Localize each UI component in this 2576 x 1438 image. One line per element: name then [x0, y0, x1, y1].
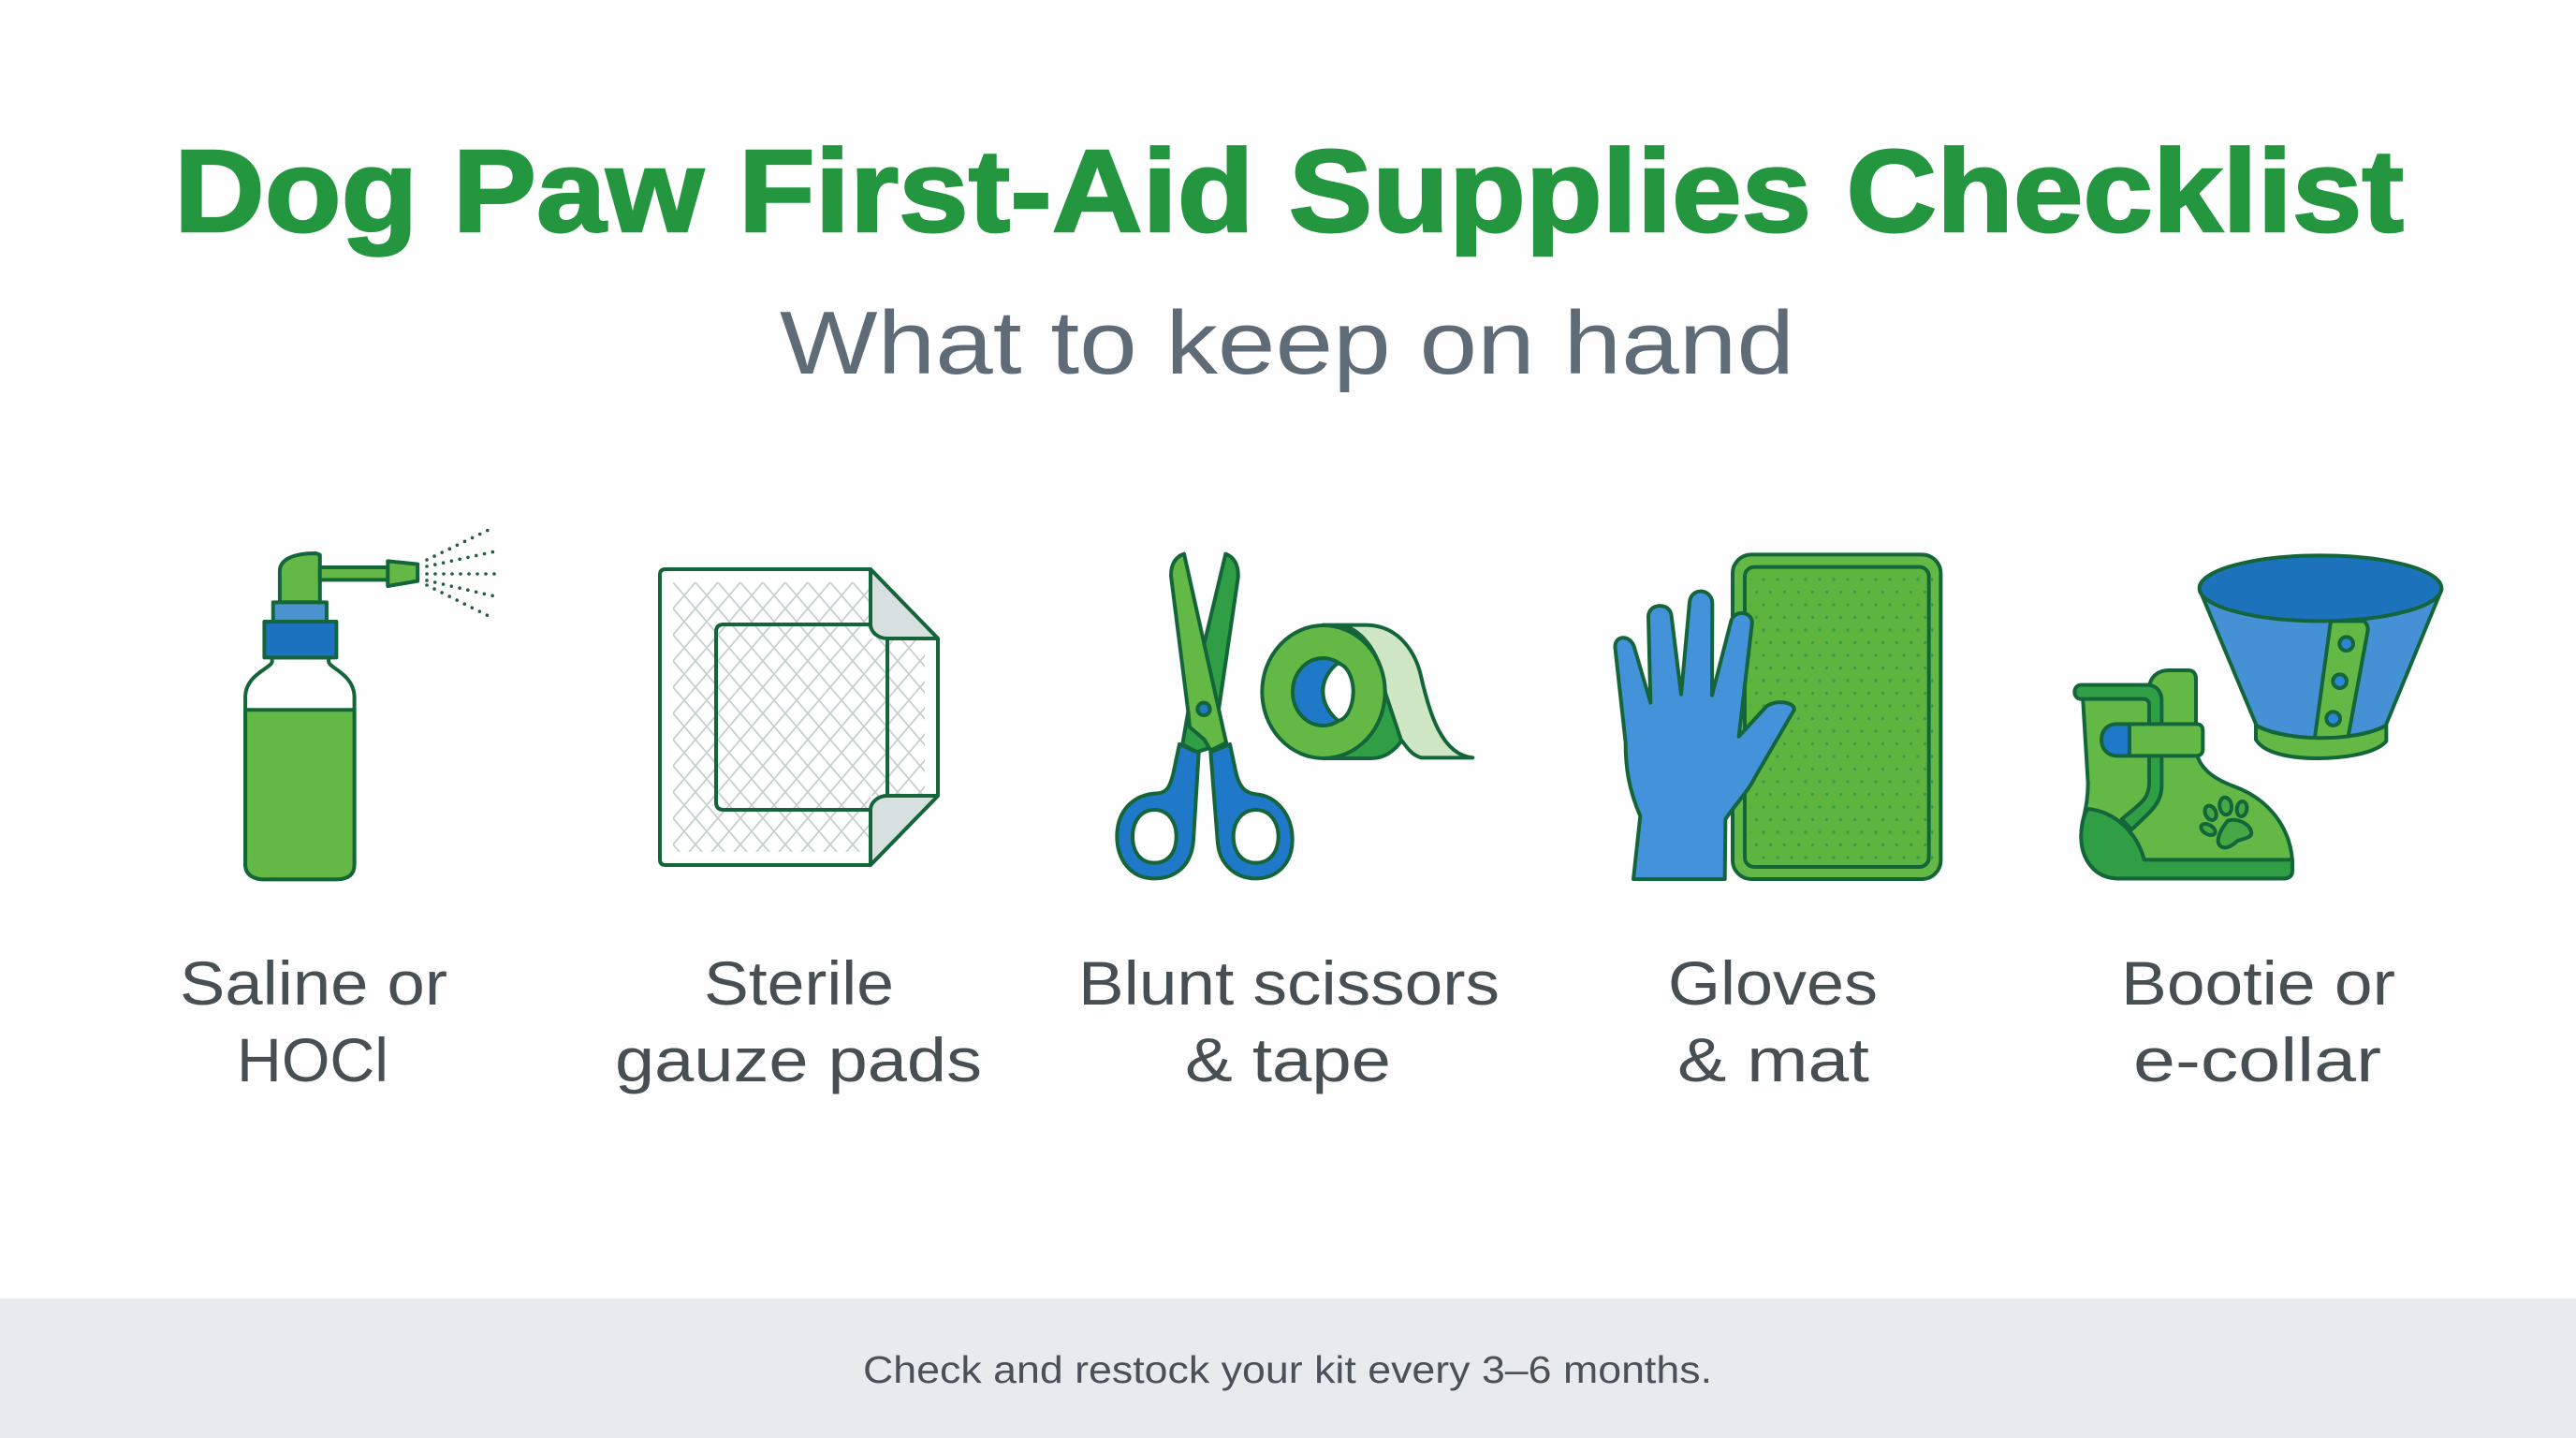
label: saline	[180, 948, 447, 1094]
icon: gauze pad	[660, 569, 938, 865]
panel: gloves and mat	[1615, 554, 1940, 1094]
label: gauze: gauze pads	[615, 1025, 982, 1094]
footer note: Check and restock your kit every 3–6 months.	[863, 1348, 1712, 1391]
label: gloves: Gloves	[1668, 948, 1878, 1018]
label: gauze	[615, 948, 982, 1094]
label: bootie: Bootie or	[2121, 948, 2395, 1018]
footer band	[0, 1299, 2576, 1438]
subtitle: What to keep on hand	[780, 293, 1794, 393]
panel: blunt scissors and tape	[1078, 554, 1500, 1094]
label: gauze: Sterile	[704, 948, 894, 1018]
label: gloves	[1668, 948, 1878, 1094]
icon: mat	[1733, 554, 1940, 879]
label: bootie	[2121, 948, 2395, 1094]
icon: tape roll	[1262, 625, 1472, 758]
label: bootie: e-collar	[2133, 1025, 2381, 1094]
icon: scissors	[1117, 554, 1293, 878]
icon: e-collar	[2200, 555, 2441, 758]
icon: glove	[1615, 592, 1794, 879]
label: saline: HOCl	[237, 1025, 388, 1094]
icon: bootie	[2074, 670, 2292, 878]
panel: saline or HOCl	[180, 529, 497, 1094]
icon: spray bottle	[245, 529, 497, 879]
label: scissors: & tape	[1185, 1025, 1391, 1094]
mat dots	[1750, 573, 1934, 865]
title: Dog Paw First-Aid Supplies Checklist	[174, 126, 2404, 257]
panel: bootie or e-collar	[2074, 555, 2441, 1094]
label: scissors	[1078, 948, 1500, 1094]
label: gloves: & mat	[1677, 1025, 1869, 1094]
label: saline: Saline or	[180, 948, 447, 1018]
label: scissors: Blunt scissors	[1078, 948, 1500, 1018]
panel: sterile gauze pads	[615, 569, 982, 1094]
